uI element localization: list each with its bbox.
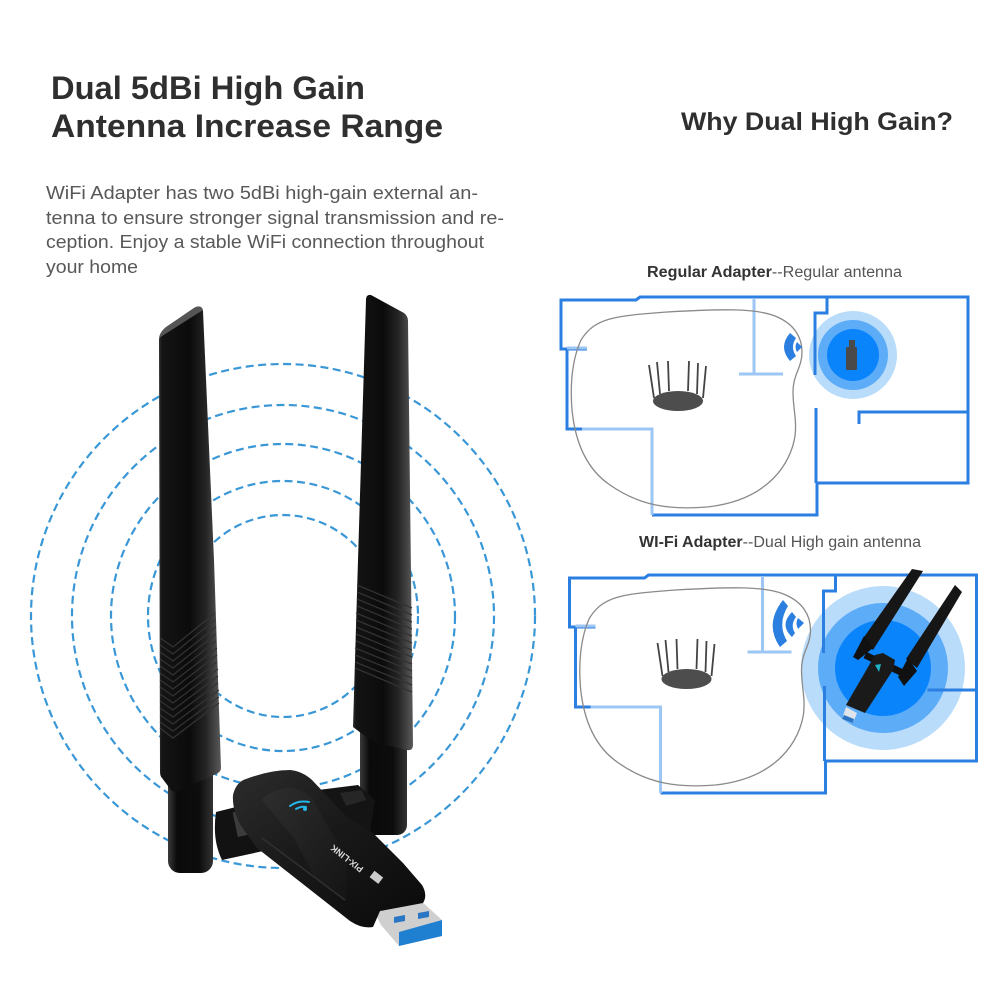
coverage circles [809,311,897,399]
floor plan: regular adapter [561,297,968,515]
signal rings [31,364,535,868]
title: Antenna Increase Range [51,108,443,144]
USB plug [373,900,442,946]
dongle body [233,770,425,927]
title: Dual 5dBi High Gain [51,70,365,106]
walls [570,575,976,793]
product: USB WiFi adapter [159,295,442,946]
description text: WiFi Adapter has two 5dBi high-gain external an- [46,183,478,203]
label: regular adapter: Regular Adapter --Regular antenna [647,264,902,281]
title [51,70,443,144]
router icon [658,639,714,689]
coverage outline [571,310,802,508]
description text [46,183,504,277]
adapter photo [842,569,962,723]
description text: ception. Enjoy a stable WiFi connection throughout [46,232,484,252]
router icon [649,361,706,411]
wifi logo [290,802,309,810]
wifi signal icon [773,600,804,647]
dongle brand text: PIX-LINK [328,842,365,874]
speed badge [370,871,383,884]
right antenna [353,295,413,835]
glossy lower strip [262,838,345,900]
wifi signal icon [784,333,802,361]
dongle highlight facet [262,788,347,902]
heading: why dual high gain: Why Dual High Gain? [681,108,953,136]
antenna hinges [215,785,375,860]
left antenna [159,306,221,873]
floor plan: wifi adapter [570,569,976,793]
description text: tenna to ensure stronger signal transmission and re- [46,208,504,228]
label: wifi adapter: WI-Fi Adapter--Dual High gain antenna [639,534,921,551]
adapter icon [846,340,857,370]
coverage outline [580,588,810,786]
walls [561,297,968,515]
coverage circles [801,586,965,750]
description text: your home [46,257,138,277]
